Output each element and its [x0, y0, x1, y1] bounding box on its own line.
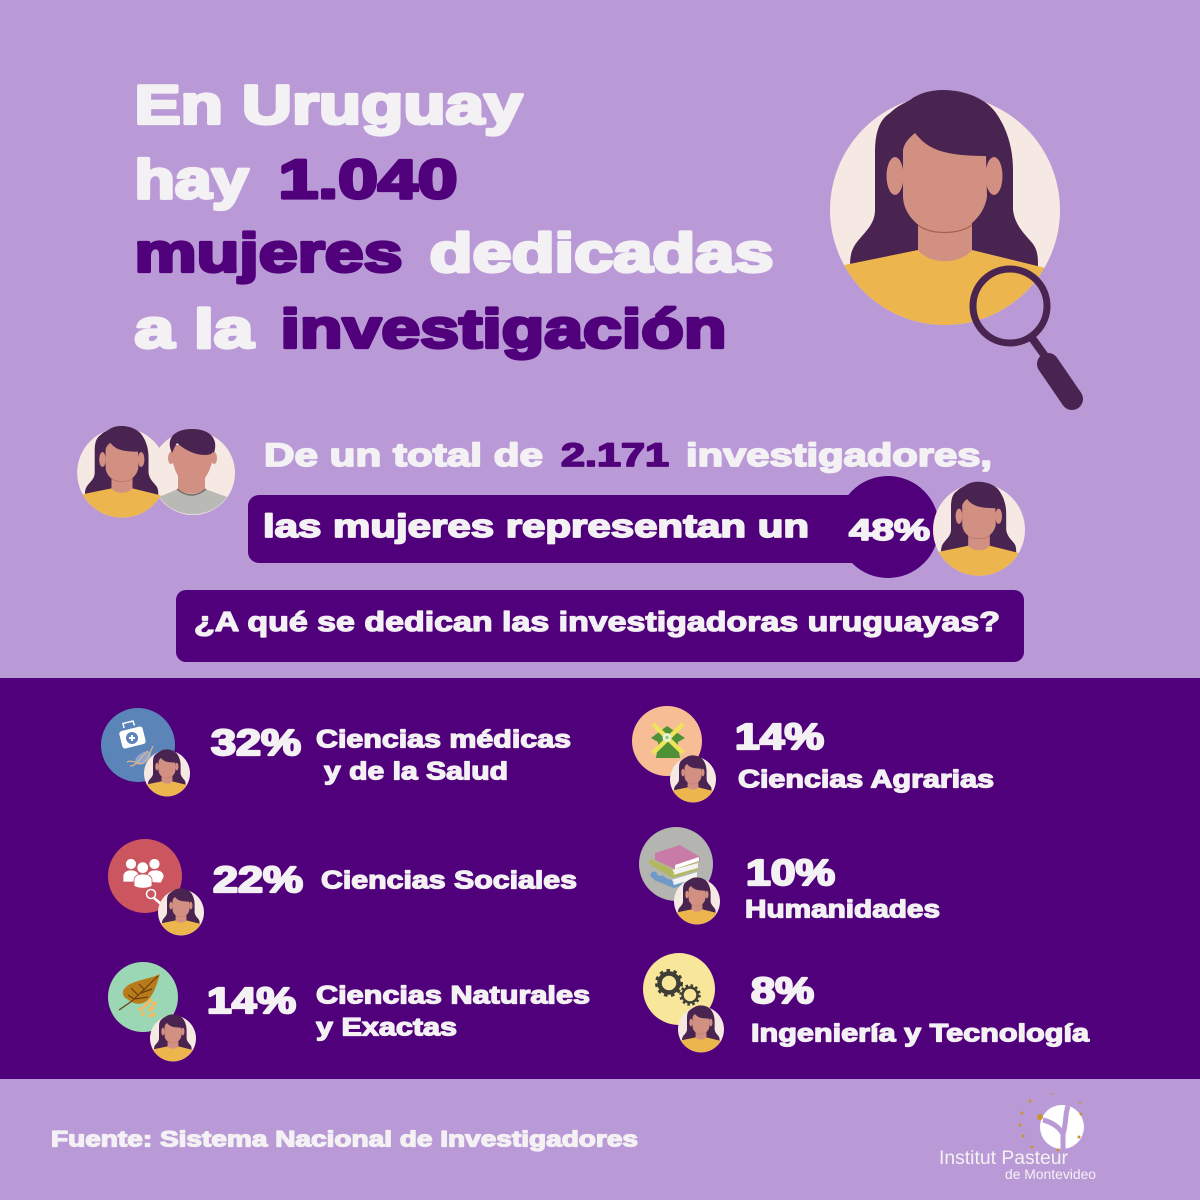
item: ciencias médicas: y de la Salud — [324, 758, 508, 786]
logo: Institut Pasteur de Montevideo: Institut Pasteur — [939, 1148, 1069, 1169]
item: ciencias médicas: Ciencias médicas — [316, 726, 571, 754]
item: ciencias médicas: 32% — [211, 722, 301, 763]
title: 1.040 — [278, 148, 458, 210]
item: ingeniería y tecnología: Ingeniería y Tecnología — [751, 1020, 1090, 1048]
title: investigación — [280, 298, 726, 360]
item: humanidades: 10% — [746, 852, 835, 893]
item: ciencias naturales: Ciencias Naturales — [316, 982, 590, 1010]
question banner: ¿A qué se dedican las investigadoras uruguayas? — [194, 606, 1000, 637]
icon: woman avatar — [929, 482, 1029, 579]
callout: las mujeres representan 48% — [248, 476, 939, 578]
text: total de investigadores — [264, 437, 992, 473]
callout: las mujeres representan 48%: 48% — [849, 514, 930, 547]
title — [134, 74, 774, 360]
title: mujeres — [134, 222, 402, 284]
panel: disciplinas — [0, 678, 1200, 1079]
item: ciencias agrarias: 14% — [735, 716, 824, 757]
icon: woman and man avatars — [73, 426, 235, 521]
item: ciencias sociales — [108, 839, 577, 937]
item: humanidades: Humanidades — [745, 896, 940, 924]
title: dedicadas — [430, 222, 774, 284]
item: ciencias sociales: Ciencias Sociales — [321, 866, 577, 894]
item: ingeniería y tecnología: 8% — [751, 970, 814, 1011]
source text: Fuente: Sistema Nacional de Investigadores — [51, 1126, 638, 1152]
text: total de investigadores: investigadores, — [686, 437, 992, 473]
item: ingeniería y tecnología — [643, 953, 1090, 1054]
item: ciencias médicas — [101, 708, 571, 798]
logo: Institut Pasteur de Montevideo — [939, 1093, 1096, 1182]
item: ciencias naturales: y Exactas — [316, 1014, 457, 1042]
text: total de investigadores: 2.171 — [561, 437, 669, 473]
item: ciencias sociales: 22% — [213, 859, 303, 900]
item: ciencias naturales — [108, 962, 590, 1063]
title: En Uruguay — [134, 74, 523, 136]
item: ciencias naturales: 14% — [207, 980, 296, 1021]
question banner — [176, 590, 1024, 662]
callout: las mujeres representan 48%: las mujeres representan un — [263, 508, 809, 544]
item: ciencias agrarias: Ciencias Agrarias — [738, 766, 994, 794]
title: hay — [134, 148, 249, 210]
logo: Institut Pasteur de Montevideo: de Montevideo — [1005, 1166, 1096, 1182]
title: a la — [134, 298, 254, 360]
illustration: woman with magnifying glass — [820, 90, 1072, 399]
text: total de investigadores: De un total de — [264, 437, 543, 473]
item: ciencias agrarias — [632, 706, 994, 804]
item: humanidades — [639, 827, 940, 926]
